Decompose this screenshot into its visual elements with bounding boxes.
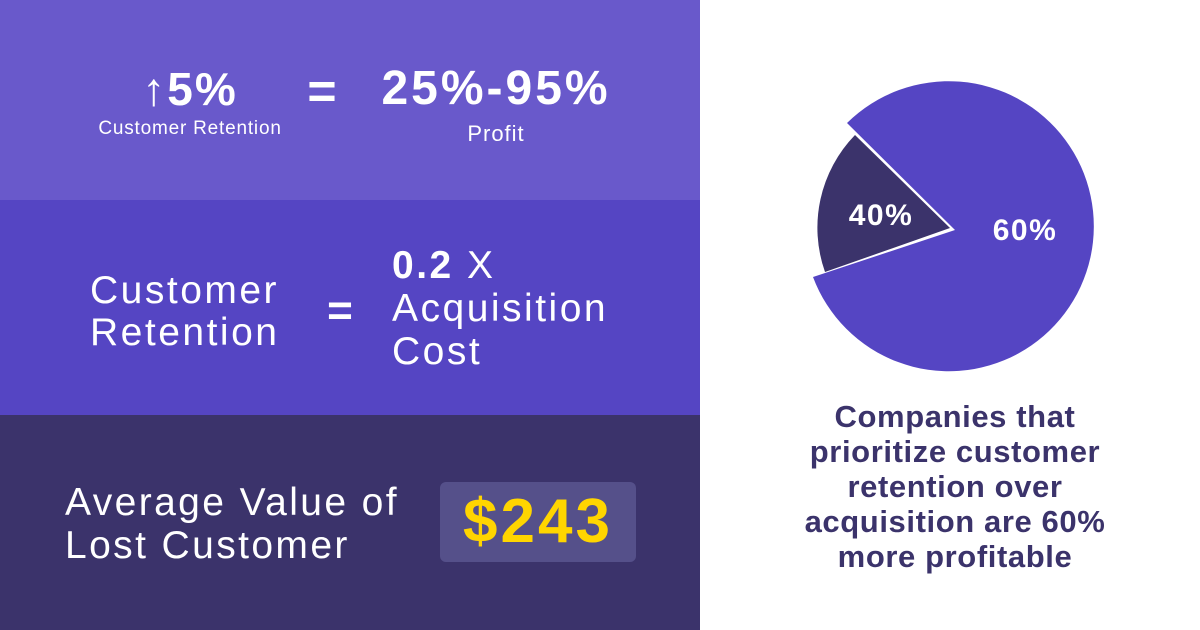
panel: lost customer bbox=[0, 415, 700, 630]
stat: profit range: 25%-95% bbox=[381, 62, 611, 115]
text: acquisition cost: Cost bbox=[392, 330, 482, 373]
text: acquisition cost: 0.2 X bbox=[392, 244, 496, 287]
text: acquisition cost bbox=[392, 244, 608, 373]
slice: 40%: 40% bbox=[849, 199, 913, 232]
slice: 60% bbox=[813, 81, 1094, 371]
panel: cost comparison bbox=[0, 200, 700, 415]
text: average value bbox=[65, 481, 399, 567]
stat: 5% retention: Customer Retention bbox=[98, 118, 282, 139]
text: acquisition cost: Acquisition bbox=[392, 287, 608, 330]
stat: profit range bbox=[381, 62, 611, 146]
caption: Companies that prioritize customer retention over acquisition are 60% more profitable bbox=[805, 399, 1105, 574]
text: customer retention bbox=[90, 269, 279, 354]
stat: profit range: Profit bbox=[467, 121, 525, 146]
equals sign: = bbox=[327, 286, 353, 335]
value box: $243 bbox=[440, 482, 636, 562]
equals sign: = bbox=[307, 63, 337, 119]
text: average value: Average Value of bbox=[65, 481, 399, 524]
text: customer retention: Retention bbox=[90, 311, 279, 354]
slice: 60%: 60% bbox=[993, 214, 1057, 247]
stat: 5% retention bbox=[98, 63, 282, 139]
slice: 40% bbox=[817, 135, 950, 272]
panel: profit bbox=[0, 0, 700, 200]
value box: $243: $243 bbox=[463, 487, 613, 556]
text: average value: Lost Customer bbox=[65, 524, 350, 567]
text: customer retention: Customer bbox=[90, 269, 279, 312]
stat: 5% retention: ↑5% bbox=[142, 63, 238, 115]
